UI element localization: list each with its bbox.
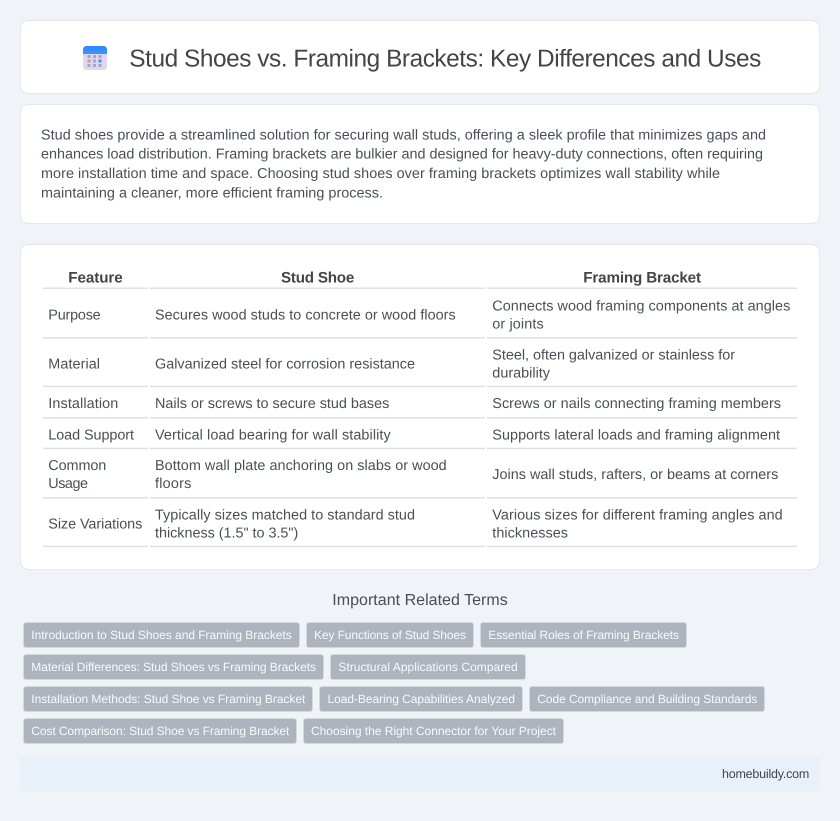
- row: installation: [43, 396, 797, 418]
- row: material: [43, 347, 797, 387]
- row: load support: [43, 427, 797, 449]
- tag: Choosing the Right Connector for Your Project: [311, 724, 557, 738]
- row: load support: Supports lateral loads and framing alignment: [492, 427, 780, 443]
- row: common usage: Joins wall studs, rafters, or beams at corners: [492, 467, 778, 483]
- row: common usage: Bottom wall plate anchoring on slabs or wood: [155, 458, 447, 474]
- row: common usage: Common: [48, 458, 106, 474]
- intro text block: [41, 127, 766, 202]
- row: installation: Screws or nails connecting framing members: [492, 396, 781, 412]
- row: purpose: or joints: [492, 316, 544, 332]
- tag: Essential Roles of Framing Brackets: [488, 628, 679, 642]
- table header row: Feature: [68, 270, 123, 287]
- intro text block: more installation time and space. Choosing stud shoes over framing brackets optimizes wall stability while: [41, 166, 720, 182]
- row: size variations: [43, 507, 797, 547]
- row: size variations: Typically sizes matched to standard stud: [155, 507, 415, 523]
- tag: Cost Comparison: Stud Shoe vs Framing Bracket: [31, 724, 290, 738]
- tag: Installation Methods: Stud Shoe vs Framing Bracket: [31, 692, 306, 706]
- panel: introduction: [20, 104, 820, 224]
- tag: Key Functions of Stud Shoes: [314, 628, 466, 642]
- tag: [306, 622, 474, 648]
- footer bar: [20, 757, 820, 791]
- row: common usage: floors: [155, 476, 191, 492]
- row: material: Material: [48, 356, 100, 372]
- footer source text: homebuildy.com: [722, 767, 809, 781]
- tag: [330, 654, 526, 680]
- panel: related term tags: [24, 622, 764, 744]
- intro text block: Stud shoes provide a streamlined solution for securing wall studs, offering a sleek profile that minimizes gaps and: [41, 127, 766, 143]
- row: purpose: Secures wood studs to concrete or wood floors: [155, 307, 456, 323]
- title: Stud Shoes vs. Framing Brackets: Key Differences and Uses: [129, 46, 761, 73]
- row: size variations: thickness (1.5" to 3.5"): [155, 525, 298, 541]
- tag: Structural Applications Compared: [338, 660, 518, 674]
- row: installation: Installation: [48, 396, 118, 412]
- tag: [320, 686, 522, 712]
- tag: [24, 686, 312, 712]
- row: purpose: Connects wood framing components at angles: [492, 298, 790, 314]
- row: material: Steel, often galvanized or stainless for: [492, 347, 735, 363]
- tag: Material Differences: Stud Shoes vs Framing Brackets: [31, 660, 316, 674]
- tag: [530, 686, 764, 712]
- row: common usage: Usage: [48, 476, 88, 492]
- intro text block: enhances load distribution. Framing brackets are bulkier and designed for heavy-duty connections, often requiring: [41, 146, 763, 162]
- tag: Load-Bearing Capabilities Analyzed: [328, 692, 515, 706]
- row: installation: Nails or screws to secure stud bases: [155, 396, 389, 412]
- row: purpose: Purpose: [48, 307, 101, 323]
- tag: [480, 622, 686, 648]
- intro text block: maintaining a cleaner, more efficient framing process.: [41, 186, 383, 202]
- row: size variations: thicknesses: [492, 525, 568, 541]
- heading: important related terms: Important Related Terms: [332, 592, 508, 609]
- row: common usage: [43, 458, 797, 498]
- row: load support: Vertical load bearing for wall stability: [155, 427, 391, 443]
- row: material: durability: [492, 365, 551, 381]
- tag: [24, 718, 296, 744]
- icon: calendar: [83, 46, 107, 70]
- header panel: [20, 20, 820, 94]
- tag: Introduction to Stud Shoes and Framing Brackets: [31, 628, 292, 642]
- table header row: [43, 270, 797, 289]
- row: size variations: Various sizes for different framing angles and: [492, 507, 783, 523]
- panel: comparison table: [20, 244, 820, 570]
- tag: [304, 718, 564, 744]
- table header row: Stud Shoe: [281, 270, 354, 287]
- row: purpose: [43, 298, 797, 338]
- row: load support: Load Support: [48, 427, 134, 443]
- tag: Code Compliance and Building Standards: [537, 692, 757, 706]
- table header row: Framing Bracket: [583, 270, 701, 287]
- row: size variations: Size Variations: [48, 516, 142, 532]
- tag: [24, 622, 300, 648]
- row: material: Galvanized steel for corrosion resistance: [155, 356, 415, 372]
- tag: [24, 654, 324, 680]
